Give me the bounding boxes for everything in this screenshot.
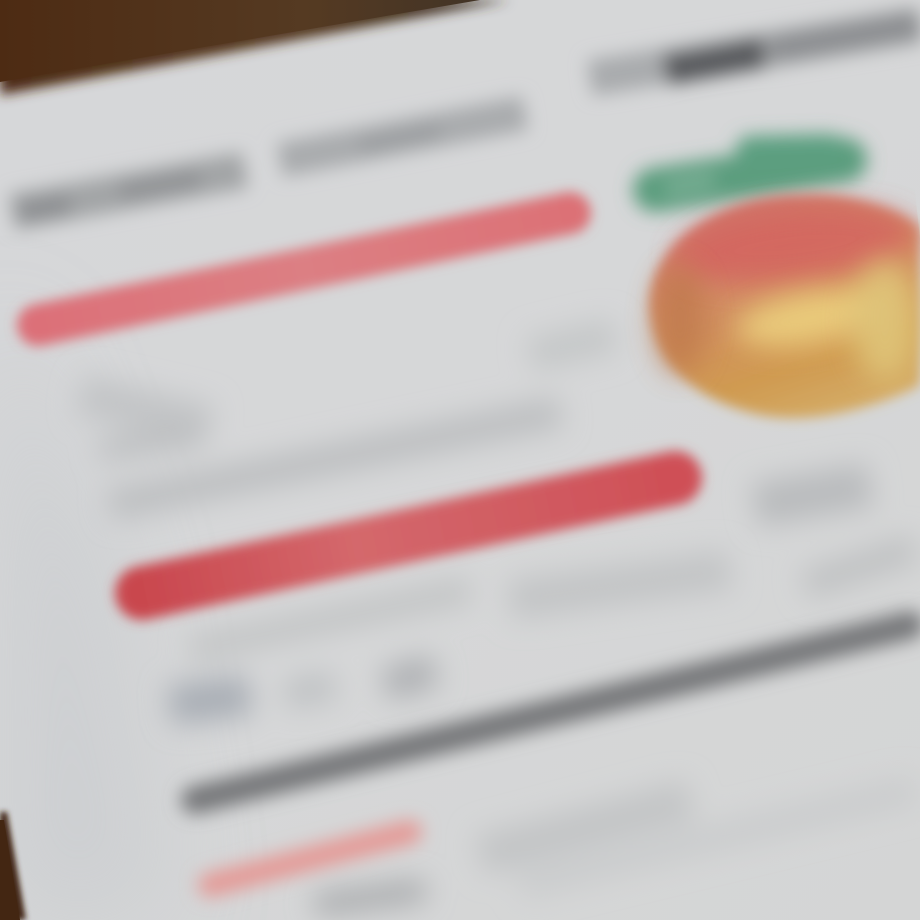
text block 1: blurred lines <box>80 335 615 505</box>
fruit red blush <box>672 197 918 293</box>
red heading bar 1 <box>38 213 570 325</box>
wooden table, bottom left <box>0 812 26 920</box>
wooden table, top left <box>0 0 510 95</box>
text block 4: bottom lines <box>315 790 915 905</box>
fruit orange left edge <box>654 265 706 375</box>
fruit highlight <box>732 279 888 357</box>
icon: fruit body <box>650 194 920 418</box>
icon: green leaves <box>655 148 845 190</box>
red heading bar 2 <box>142 478 675 593</box>
text block 2: blurred lines <box>170 570 730 705</box>
red bottom heading <box>210 832 410 885</box>
text block 3: right of bar 2 <box>755 485 915 585</box>
heading: blurred title text <box>12 113 525 212</box>
icon: fruit with green leaves <box>650 148 920 418</box>
paper shading at left <box>0 300 170 920</box>
fruit pale yellow right side <box>851 260 919 380</box>
gray divider bar <box>195 625 910 800</box>
top right header band <box>590 24 920 78</box>
